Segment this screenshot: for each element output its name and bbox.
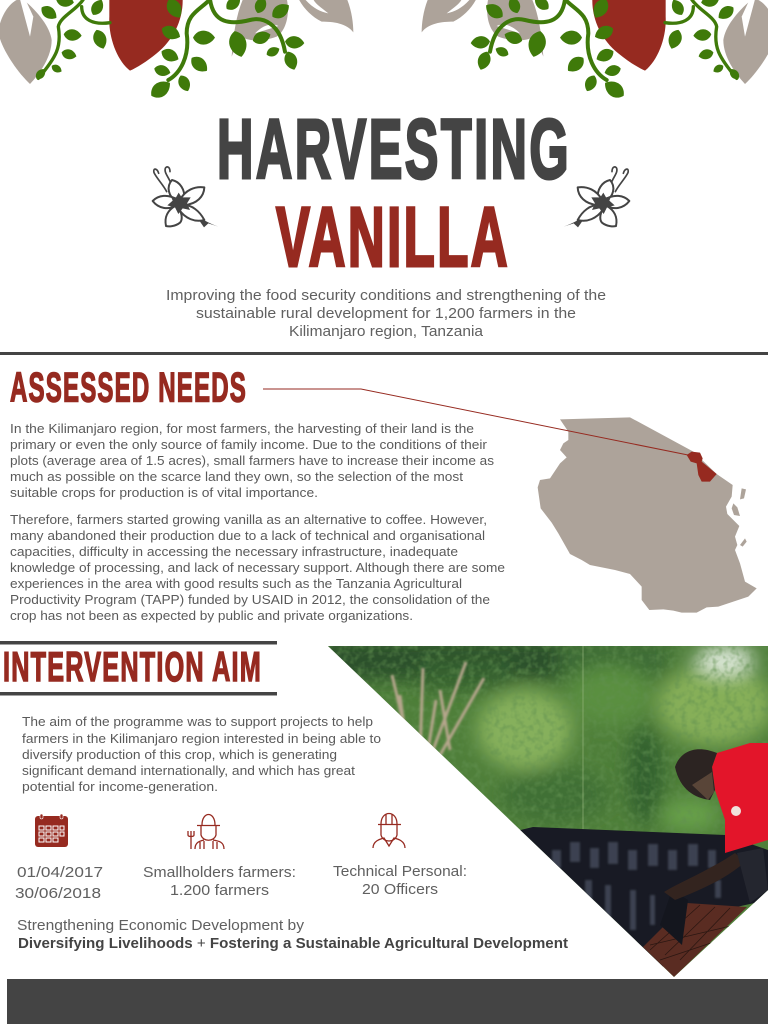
- text block: assessed needs: capacities, difficulty in accessing the necessary infrastructure, inadequate: [10, 544, 458, 559]
- text block: assessed needs: suitable crops for production is of vital importance.: [10, 485, 318, 500]
- decoration: right garland of vines and leaves: [422, 0, 768, 102]
- text block: assessed needs: experiences in the area with good results such as the Tanzania Agricultural: [10, 576, 462, 591]
- text block: assessed needs: knowledge of processing, and lack of necessary support. Although there are some: [10, 560, 505, 575]
- callout: development statement: Strengthening Economic Development by: [17, 917, 305, 934]
- stat: dates: 30/06/2018: [15, 885, 101, 902]
- stat: dates: 01/04/2017: [17, 864, 103, 881]
- text block: assessed needs: many abandoned their production due to a lack of technical and organisational: [10, 528, 485, 543]
- text block: assessed needs: plots (average area of 1.5 acres), small farmers have to increase their income as: [10, 453, 494, 468]
- subtitle: sustainable rural development for 1,200 farmers in the: [196, 305, 576, 322]
- subtitle: Improving the food security conditions and strengthening of the: [166, 287, 606, 304]
- text block: assessed needs: much as possible on the scarce land they own, so the selection of the most: [10, 469, 463, 484]
- subtitle: Kilimanjaro region, Tanzania: [289, 323, 484, 340]
- text block: assessed needs: Productivity Program (TAPP) funded by USAID in 2012, the consolidation of the: [10, 592, 490, 607]
- stat: smallholder farmers: [143, 864, 296, 899]
- icon: technician with hard hat: [373, 814, 405, 848]
- text block: assessed needs: Therefore, farmers started growing vanilla as an alternative to coffee. However,: [10, 512, 487, 527]
- icon: right vanilla flower: [564, 167, 629, 227]
- stat: dates: [15, 864, 103, 902]
- title: VANILLA: [276, 190, 510, 284]
- text block: assessed needs: primary or even the only source of family income. Due to the conditions of their: [10, 437, 488, 452]
- photo: farmer tending vanilla seedlings: [320, 640, 768, 985]
- text block: intervention aim: farmers in the Kilimanjaro region interested in being able to: [22, 731, 381, 746]
- callout: development statement: [17, 917, 568, 952]
- stat: technical personnel: Technical Personal:: [333, 863, 467, 880]
- text block: assessed needs: crop has not been as expected by public and private organizations.: [10, 608, 413, 623]
- icon: calendar: [35, 814, 68, 847]
- icon: farmer with fork: [188, 814, 224, 849]
- stat: smallholder farmers: Smallholders farmers:: [143, 864, 296, 881]
- callout: development statement: Diversifying Livelihoods + Fostering a Sustainable Agricultural Development: [18, 936, 568, 952]
- stat: smallholder farmers: 1.200 farmers: [170, 882, 269, 899]
- heading: intervention aim: [0, 641, 277, 696]
- icon: left vanilla flower: [153, 167, 218, 227]
- stat: technical personnel: [333, 863, 467, 898]
- text block: assessed needs: In the Kilimanjaro region, for most farmers, the harvesting of their land is the: [10, 421, 474, 436]
- heading: assessed needs: ASSESSED NEEDS: [10, 364, 247, 410]
- subtitle: [166, 287, 606, 340]
- section divider: [0, 352, 768, 355]
- text block: intervention aim: [22, 714, 381, 794]
- text block: assessed needs: [10, 421, 505, 623]
- leader line from heading to map: [263, 389, 688, 455]
- heading: intervention aim: INTERVENTION AIM: [3, 643, 262, 690]
- text block: intervention aim: diversify production of this crop, which is generating: [22, 747, 337, 762]
- decoration: left garland of vines and leaves: [0, 0, 353, 102]
- footer bar: [7, 979, 768, 1024]
- text block: intervention aim: potential for income-generation.: [22, 779, 218, 794]
- stat: technical personnel: 20 Officers: [362, 881, 438, 898]
- text block: intervention aim: The aim of the programme was to support projects to help: [22, 714, 373, 729]
- title: [217, 102, 571, 284]
- text block: intervention aim: significant demand internationally, and which has great: [22, 763, 355, 778]
- map: Tanzania with Kilimanjaro region highlighted: [538, 417, 757, 613]
